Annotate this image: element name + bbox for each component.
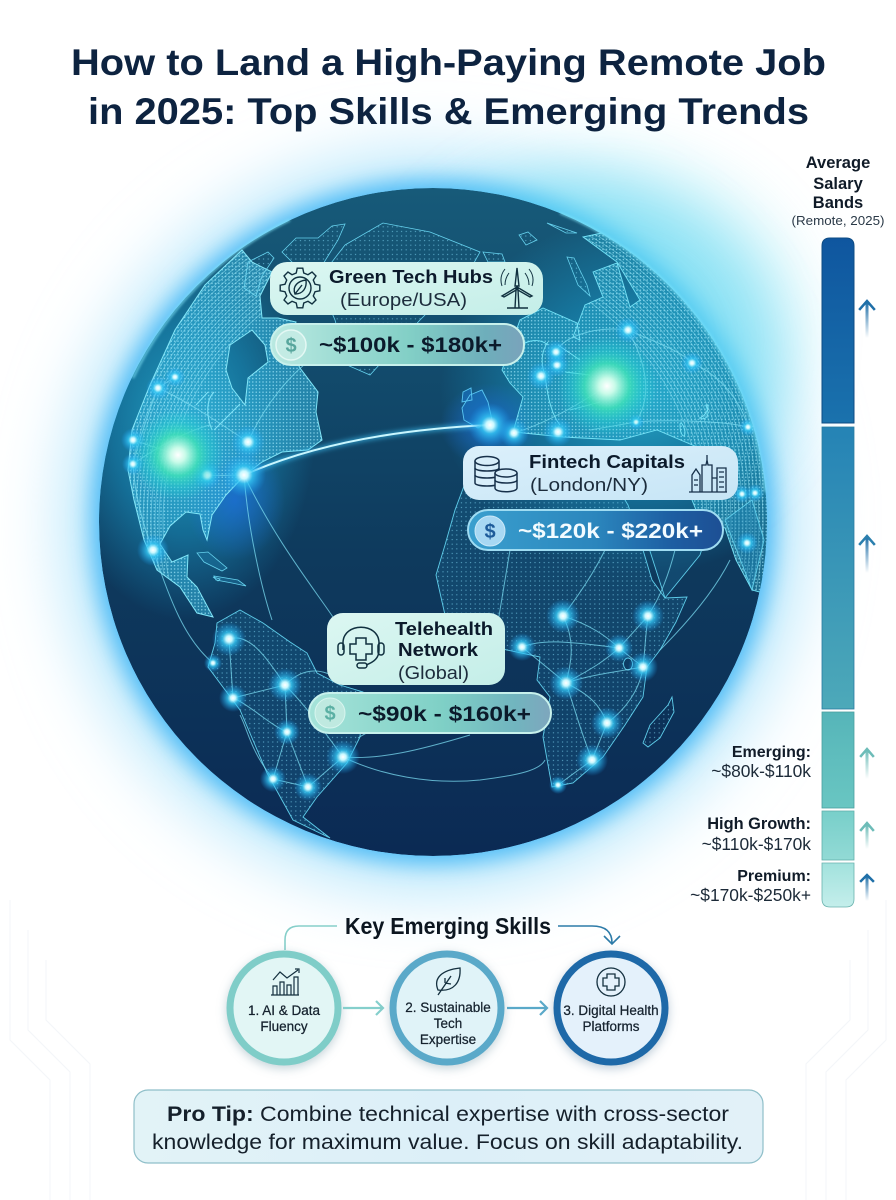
continent: South America [197,552,363,838]
globe body [99,188,767,856]
salary value: ~$90k - $160k+ [358,703,531,726]
atmospheric wash: Eurasia [456,238,766,562]
heading: Fintech Capitals [529,452,685,472]
icon: city skyline [689,455,727,492]
skill 1: Fluency [260,1019,308,1034]
globe rim [133,213,765,492]
arrow 5 [861,875,873,901]
icon: dollar: $ [285,335,297,357]
skill 2: Expertise [420,1032,476,1047]
band label: Premium [690,868,811,905]
arrow: skill 2 to 3 [507,1001,547,1015]
skill 3: Platforms [582,1019,640,1034]
label: Fintech Capitals [463,446,738,500]
band label: High Growth: High Growth: [707,815,811,833]
label: Green Tech Hubs [270,262,543,315]
green hub: Asia [562,340,654,433]
globe glow [65,154,801,890]
atmospheric wash: US east [196,462,280,553]
skill 1: 1. AI & Data [248,1003,321,1018]
background circuit pattern [10,900,886,1200]
pro tip: knowledge for maximum value. Focus on skill adaptability. [152,1131,743,1154]
main arc: New York to London [244,425,490,475]
arrow 4 [861,823,873,849]
salary pill: Green Tech [271,324,524,365]
salary legend heading: Salary [813,175,864,193]
pro tip [134,1090,763,1163]
continent: North America [128,250,322,617]
skills connector right arrow [558,926,620,944]
icon: dollar: $ [324,703,336,725]
label card [270,262,543,315]
icon: dollar [315,698,345,728]
skill 2: 2. Sustainable [405,1000,491,1015]
skill 3 [557,954,665,1062]
band label: Emerging: Emerging: [732,744,811,761]
icon: wind turbine [501,268,533,308]
skills connector left [285,926,337,950]
salary band bar [822,238,854,907]
atmospheric wash: UK [445,388,530,456]
icon: coins [475,456,517,492]
limb hatching [130,234,764,591]
subheading: (Europe/USA) [340,290,467,310]
arrow 1 [860,301,874,338]
band label: High Growth: ~$110k-$170k [702,834,811,854]
salary legend heading: (Remote, 2025) [792,213,884,228]
atmospheric wash: North America [99,266,304,608]
band label: High Growth [702,815,811,854]
globe [99,188,767,856]
label card [327,613,505,685]
continent: Eurasia [462,233,767,592]
label: Telehealth Network [327,613,505,685]
salary value: ~$120k - $220k+ [518,520,703,543]
skill 3: 3. Digital Health [563,1003,659,1018]
heading line 2: Network [398,640,479,660]
salary legend heading: Bands [813,194,863,212]
network nodes [121,317,764,801]
salary arrows [860,301,874,901]
continent: Africa and Arabia [436,466,764,787]
icon: dollar [276,330,306,360]
icon: headset with cross [338,627,384,668]
subheading: (Global) [398,663,469,683]
network connection lines [133,329,748,787]
skill 2 [393,954,501,1062]
label card [463,446,738,500]
continent: Arctic islands and Greenland [244,223,590,375]
salary value: ~$100k - $180k+ [319,334,502,357]
salary legend heading: Average [806,154,870,172]
salary pill: Telehealth [309,693,551,733]
band label: Emerging: ~$80k-$110k [711,761,811,781]
arrow 3 [861,749,873,779]
skills heading: Key Emerging Skills [345,913,551,939]
title: How to Land a High-Paying Remote Job [71,42,826,83]
salary legend heading [792,154,884,228]
salary pill: Fintech [468,510,723,550]
subheading: (London/NY) [530,475,648,495]
icon: chart [271,969,299,995]
icon: medical cross [597,968,625,996]
arrow 2 [860,536,874,573]
icon: leaf [437,968,460,995]
band label: Premium: Premium: [737,868,811,885]
arrow: skill 1 to 2 [343,1001,383,1015]
band label: Premium: ~$170k-$250k+ [690,885,811,905]
title: in 2025: Top Skills & Emerging Trends [88,91,809,132]
heading: Telehealth [395,619,493,639]
pro tip: Pro Tip: Combine technical expertise with cross-sector [167,1103,729,1126]
band label: Emerging [711,744,811,781]
heading: Green Tech Hubs [329,267,493,287]
skill 2: Tech [434,1016,462,1031]
icon: gear with leaf [280,268,320,308]
icon: dollar [475,516,505,546]
title [71,42,826,132]
icon: dollar: $ [484,521,496,543]
green hub: North America [134,412,220,498]
skill 1 [230,954,338,1062]
